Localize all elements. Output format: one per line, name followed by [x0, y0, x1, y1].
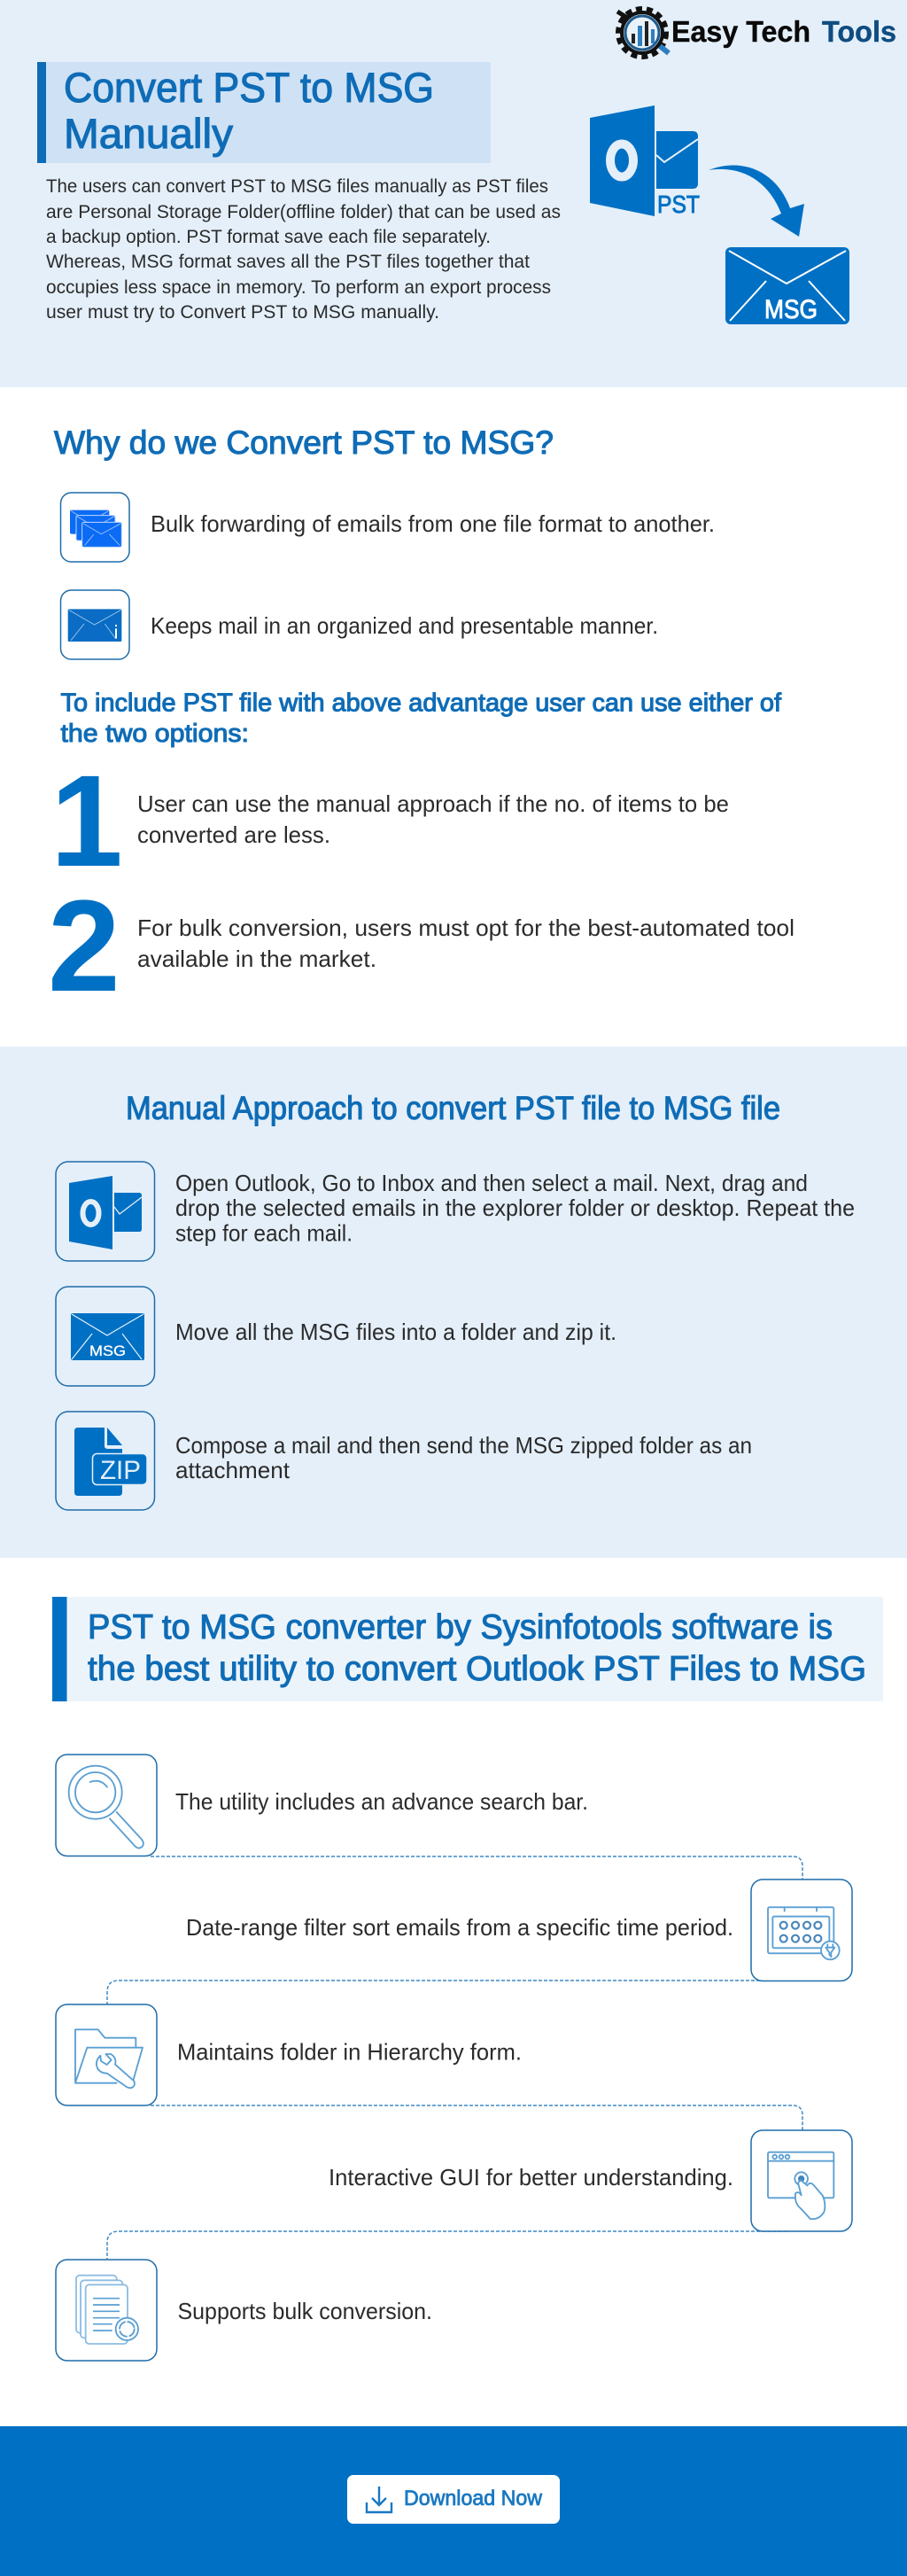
option 2: available in the market. [137, 946, 376, 972]
step: compose mail: Compose a mail and then send the MSG zipped folder as an [175, 1432, 752, 1459]
panel: hero header [0, 0, 907, 387]
banner heading: the best utility to convert Outlook PST Files to MSG [88, 1650, 866, 1688]
step: compose mail [56, 1412, 752, 1510]
feature: bulk conversion: Supports bulk conversion. [177, 2298, 432, 2324]
intro paragraph [46, 175, 561, 323]
panel: manual approach [0, 1047, 907, 1558]
intro paragraph: occupies less space in memory. To perform an export process [46, 276, 551, 298]
panel: converter features [52, 1597, 883, 2361]
feature: search bar [56, 1755, 588, 1856]
arrow: PST to MSG [709, 165, 804, 237]
intro paragraph: a backup option. PST format save each file separately. [46, 226, 491, 247]
item: organized mail: Keeps mail in an organized and presentable manner. [151, 612, 658, 639]
feature: search bar: The utility includes an advance search bar. [175, 1788, 588, 1815]
step: compose mail: ZIP [100, 1456, 141, 1485]
logo: Easy Tech Tools [617, 9, 896, 57]
panel: footer call to action [0, 2426, 907, 2576]
feature: folder hierarchy: Maintains folder in Hierarchy form. [177, 2038, 522, 2065]
item: bulk forwarding: Bulk forwarding of emails from one file format to another. [151, 510, 715, 537]
intro paragraph: are Personal Storage Folder(offline folder) that can be used as [46, 201, 561, 222]
step: zip the files [56, 1287, 616, 1386]
step: zip the files: Move all the MSG files into a folder and zip it. [175, 1319, 616, 1345]
icon: MSG envelope: MSG [764, 295, 818, 324]
option 2: 2 [48, 874, 120, 1019]
feature: interactive GUI [329, 2130, 852, 2231]
heading: why convert: Why do we Convert PST to MSG? [54, 424, 554, 461]
icon: Outlook PST: PST [657, 191, 700, 218]
subheading: two options: To include PST file with above advantage user can use either of [60, 689, 782, 718]
logo: Easy Tech Tools: Tools [822, 15, 896, 48]
connector 4 [107, 2231, 787, 2260]
step: zip the files: MSG [89, 1342, 126, 1359]
logo: Easy Tech Tools: Easy Tech [671, 15, 810, 48]
title block: Convert PST to MSG [64, 64, 434, 111]
step: open outlook: Open Outlook, Go to Inbox and then select a mail. Next, drag and [175, 1170, 808, 1196]
subheading: two options [60, 689, 782, 748]
subheading: two options: the two options: [60, 720, 249, 748]
feature: bulk conversion [56, 2260, 432, 2361]
step: open outlook [56, 1162, 855, 1261]
heading: manual approach: Manual Approach to convert PST file to MSG file [126, 1090, 780, 1126]
intro paragraph: The users can convert PST to MSG files manually as PST files [46, 175, 548, 197]
intro paragraph: Whereas, MSG format saves all the PST files together that [46, 251, 530, 272]
feature: date-range filter: Date-range filter sort emails from a specific time period. [186, 1914, 733, 1941]
intro paragraph: user must try to Convert PST to MSG manually. [46, 301, 439, 323]
option 1: 1 [50, 749, 123, 894]
title block [37, 62, 491, 163]
option 1: converted are less. [137, 821, 330, 848]
option 2: For bulk conversion, users must opt for the best-automated tool [137, 914, 795, 941]
download button: Download Now [404, 2487, 543, 2510]
step: open outlook: step for each mail. [175, 1219, 353, 1246]
feature: date-range filter [186, 1879, 852, 1981]
item: organized mail [60, 590, 658, 659]
option 1 [50, 749, 729, 894]
feature: interactive GUI: Interactive GUI for better understanding. [329, 2164, 733, 2191]
feature: folder hierarchy [56, 2004, 522, 2105]
banner heading [52, 1597, 883, 1701]
connector 3 [151, 2105, 802, 2130]
panel: why convert [48, 424, 795, 1019]
title block: Manually [64, 110, 234, 157]
icon: Outlook PST [590, 105, 700, 218]
download button [347, 2475, 560, 2524]
connector 1 [151, 1856, 802, 1880]
option 1: User can use the manual approach if the no. of items to be [137, 790, 729, 817]
option 2 [48, 874, 795, 1019]
connector 2 [107, 1981, 787, 2004]
step: open outlook: drop the selected emails in the explorer folder or desktop. Repeat the [175, 1195, 855, 1221]
banner heading: PST to MSG converter by Sysinfotools software is [88, 1608, 833, 1646]
item: bulk forwarding [60, 493, 715, 562]
step: compose mail: attachment [175, 1457, 291, 1483]
icon: MSG envelope [725, 247, 849, 324]
